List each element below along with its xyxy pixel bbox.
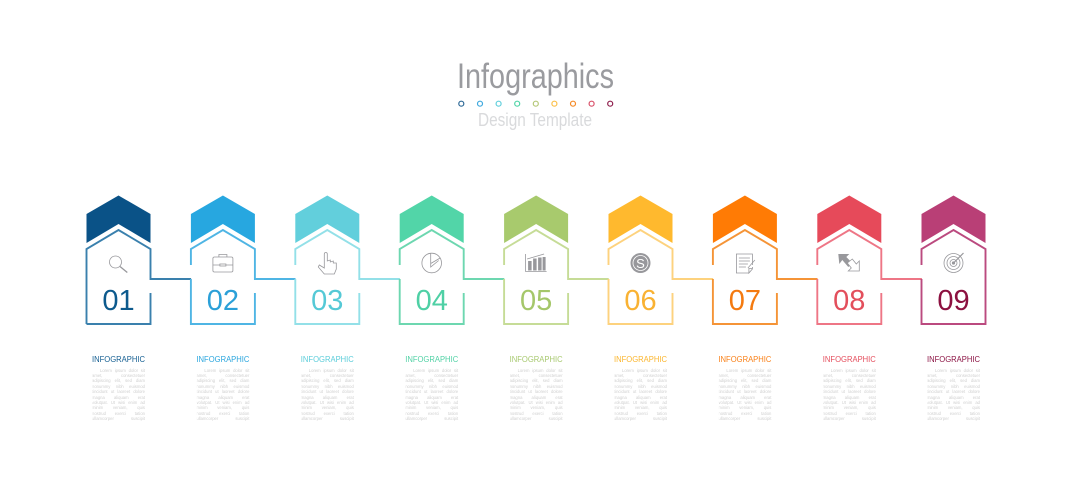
body text 05: adipiscing elit, sed diam bbox=[510, 378, 563, 383]
chevron 07 bbox=[713, 196, 777, 243]
body text 08: tincidunt ut laoreet dolore bbox=[823, 389, 876, 394]
body text 07: amet, consectetuer bbox=[718, 373, 771, 378]
number 09: 09 bbox=[937, 285, 970, 317]
body text 05: Lorem ipsum dolor sit bbox=[518, 368, 563, 372]
chevron 09 bbox=[922, 196, 986, 243]
body text 02: amet, consectetuer bbox=[196, 373, 249, 378]
body text 05: volutpat. Ut wisi enim ad bbox=[510, 400, 563, 405]
house outline 04 bbox=[400, 230, 504, 324]
icon: pie chart bbox=[422, 253, 442, 273]
body text 05: tincidunt ut laoreet dolore bbox=[510, 389, 563, 394]
body text 01: adipiscing elit, sed diam bbox=[92, 378, 145, 383]
number 08: 08 bbox=[833, 285, 865, 317]
body text 02: tincidunt ut laoreet dolore bbox=[196, 389, 249, 394]
icon: document with pen bbox=[736, 254, 755, 273]
body text 04: amet, consectetuer bbox=[405, 373, 458, 378]
body text 02: adipiscing elit, sed diam bbox=[196, 378, 249, 383]
body text 08: nonummy nibh euismod bbox=[823, 384, 876, 389]
heading 01: INFOGRAPHIC bbox=[92, 354, 145, 364]
body text 01: volutpat. Ut wisi enim ad bbox=[92, 400, 145, 405]
body text 09: Lorem ipsum dolor sit bbox=[935, 368, 980, 372]
body text 08: nostrud exerci tation bbox=[823, 411, 876, 416]
icon: dollar coin bbox=[630, 253, 650, 273]
body text 04: tincidunt ut laoreet dolore bbox=[405, 389, 458, 394]
heading 04: INFOGRAPHIC bbox=[405, 354, 458, 364]
house outline 06 bbox=[608, 230, 713, 324]
subtitle: Design Template bbox=[478, 110, 592, 130]
body text 06: minim veniam, quis bbox=[614, 405, 667, 410]
heading 09: INFOGRAPHIC bbox=[927, 354, 980, 364]
body text 07: volutpat. Ut wisi enim ad bbox=[718, 400, 771, 405]
body text 07: minim veniam, quis bbox=[718, 405, 771, 410]
step 05 bbox=[504, 196, 609, 424]
chevron 01 bbox=[86, 196, 150, 243]
body text 05: nonummy nibh euismod bbox=[510, 384, 563, 389]
house outline 09 bbox=[922, 230, 986, 324]
body text 03: magna aliquam erat bbox=[301, 395, 354, 400]
body text 02: nonummy nibh euismod bbox=[196, 384, 249, 389]
body text 07: magna aliquam erat bbox=[718, 395, 771, 400]
chevron 02 bbox=[191, 196, 255, 243]
heading 05: INFOGRAPHIC bbox=[510, 354, 563, 364]
body text 01: Lorem ipsum dolor sit bbox=[100, 368, 145, 372]
body text 07: Lorem ipsum dolor sit bbox=[726, 368, 771, 372]
body text 06: adipiscing elit, sed diam bbox=[614, 378, 667, 383]
house outline 01 bbox=[86, 230, 191, 324]
body text 01: amet, consectetuer bbox=[92, 373, 145, 378]
body text 09: nostrud exerci tation bbox=[927, 411, 980, 416]
chevron 08 bbox=[817, 196, 881, 243]
heading 03: INFOGRAPHIC bbox=[301, 354, 354, 364]
number 05: 05 bbox=[520, 285, 552, 317]
house outline 08 bbox=[817, 230, 922, 324]
body text 03: amet, consectetuer bbox=[301, 373, 354, 378]
title: Infographics bbox=[457, 57, 614, 96]
icon: diverging arrows bbox=[838, 254, 859, 271]
step 03 bbox=[295, 196, 400, 424]
number 01: 01 bbox=[102, 285, 135, 317]
heading 06: INFOGRAPHIC bbox=[614, 354, 667, 364]
icon: target bbox=[944, 253, 964, 272]
body text 06: nostrud exerci tation bbox=[614, 411, 667, 416]
body text 02: ullamcorper suscipit bbox=[196, 416, 249, 421]
body text 04: volutpat. Ut wisi enim ad bbox=[405, 400, 458, 405]
body text 09: magna aliquam erat bbox=[927, 395, 980, 400]
heading 02: INFOGRAPHIC bbox=[196, 354, 249, 364]
body text 02: Lorem ipsum dolor sit bbox=[204, 368, 249, 372]
body text 04: Lorem ipsum dolor sit bbox=[413, 368, 458, 372]
body text 01: magna aliquam erat bbox=[92, 395, 145, 400]
body text 02: volutpat. Ut wisi enim ad bbox=[196, 400, 249, 405]
body text 03: Lorem ipsum dolor sit bbox=[309, 368, 354, 372]
chevron 05 bbox=[504, 196, 568, 243]
body text 09: tincidunt ut laoreet dolore bbox=[927, 389, 980, 394]
body text 08: adipiscing elit, sed diam bbox=[823, 378, 876, 383]
chevron 06 bbox=[608, 196, 672, 243]
body text 02 bbox=[196, 368, 250, 424]
body text 09: ullamcorper suscipit bbox=[927, 416, 980, 421]
step 09 bbox=[922, 196, 986, 424]
body text 04: nostrud exerci tation bbox=[405, 411, 458, 416]
body text 03: adipiscing elit, sed diam bbox=[301, 378, 354, 383]
house outline 03 bbox=[295, 230, 400, 324]
body text 06: tincidunt ut laoreet dolore bbox=[614, 389, 667, 394]
body text 01: tincidunt ut laoreet dolore bbox=[92, 389, 145, 394]
body text 04: ullamcorper suscipit bbox=[405, 416, 458, 421]
body text 02: magna aliquam erat bbox=[196, 395, 249, 400]
step 08 bbox=[817, 196, 922, 424]
body text 07: adipiscing elit, sed diam bbox=[718, 378, 771, 383]
heading 08: INFOGRAPHIC bbox=[823, 354, 876, 364]
step 01 bbox=[86, 196, 191, 424]
body text 09: minim veniam, quis bbox=[927, 405, 980, 410]
number 02: 02 bbox=[207, 285, 239, 317]
chevron 03 bbox=[295, 196, 359, 243]
body text 07: nostrud exerci tation bbox=[718, 411, 771, 416]
body text 06: magna aliquam erat bbox=[614, 395, 667, 400]
body text 08: magna aliquam erat bbox=[823, 395, 876, 400]
house outline 07 bbox=[713, 230, 818, 324]
number 06: 06 bbox=[624, 285, 657, 317]
step 07 bbox=[713, 196, 818, 424]
body text 06: amet, consectetuer bbox=[614, 373, 667, 378]
body text 09: amet, consectetuer bbox=[927, 373, 980, 378]
body text 03: nonummy nibh euismod bbox=[301, 384, 354, 389]
body text 03: minim veniam, quis bbox=[301, 405, 354, 410]
body text 02: nostrud exerci tation bbox=[196, 411, 249, 416]
icon: pointing hand bbox=[318, 253, 336, 274]
body text 04: minim veniam, quis bbox=[405, 405, 458, 410]
body text 09: adipiscing elit, sed diam bbox=[927, 378, 980, 383]
body text 07: ullamcorper suscipit bbox=[718, 416, 771, 421]
step 06 bbox=[608, 196, 713, 424]
body text 08: ullamcorper suscipit bbox=[823, 416, 876, 421]
body text 01: ullamcorper suscipit bbox=[92, 416, 145, 421]
body text 04: adipiscing elit, sed diam bbox=[405, 378, 458, 383]
body text 02: minim veniam, quis bbox=[196, 405, 249, 410]
body text 08: Lorem ipsum dolor sit bbox=[831, 368, 876, 372]
heading 07: INFOGRAPHIC bbox=[718, 354, 771, 364]
number 03: 03 bbox=[311, 285, 343, 317]
body text 06: Lorem ipsum dolor sit bbox=[622, 368, 667, 372]
step 04 bbox=[400, 196, 504, 424]
body text 04: nonummy nibh euismod bbox=[405, 384, 458, 389]
body text 05: minim veniam, quis bbox=[510, 405, 563, 410]
body text 01: minim veniam, quis bbox=[92, 405, 145, 410]
body text 07 bbox=[718, 368, 772, 424]
body text 06: nonummy nibh euismod bbox=[614, 384, 667, 389]
body text 08: amet, consectetuer bbox=[823, 373, 876, 378]
body text 01: nonummy nibh euismod bbox=[92, 384, 145, 389]
body text 04: magna aliquam erat bbox=[405, 395, 458, 400]
number 07: 07 bbox=[729, 285, 761, 317]
body text 06: ullamcorper suscipit bbox=[614, 416, 667, 421]
body text 08: minim veniam, quis bbox=[823, 405, 876, 410]
body text 06 bbox=[614, 368, 668, 424]
house outline 05 bbox=[504, 230, 609, 324]
icon: magnifier bbox=[110, 256, 127, 272]
body text 07: tincidunt ut laoreet dolore bbox=[718, 389, 771, 394]
body text 07: nonummy nibh euismod bbox=[718, 384, 771, 389]
icon: briefcase bbox=[213, 254, 233, 272]
row of coloured dots bbox=[459, 101, 613, 106]
icon: dollar coin: S bbox=[636, 256, 645, 271]
icon: bar chart bbox=[526, 254, 547, 272]
body text 01: nostrud exerci tation bbox=[92, 411, 145, 416]
body text 09 bbox=[927, 368, 981, 424]
body text 03: tincidunt ut laoreet dolore bbox=[301, 389, 354, 394]
body text 05: ullamcorper suscipit bbox=[510, 416, 563, 421]
body text 01 bbox=[92, 368, 146, 424]
body text 05 bbox=[510, 368, 564, 424]
body text 04 bbox=[405, 368, 459, 424]
body text 05: amet, consectetuer bbox=[510, 373, 563, 378]
house outline 02 bbox=[191, 230, 296, 324]
body text 06: volutpat. Ut wisi enim ad bbox=[614, 400, 667, 405]
number 04: 04 bbox=[416, 285, 448, 317]
step 02 bbox=[191, 196, 296, 424]
body text 05: magna aliquam erat bbox=[510, 395, 563, 400]
body text 08 bbox=[823, 368, 877, 424]
body text 03: ullamcorper suscipit bbox=[301, 416, 354, 421]
body text 08: volutpat. Ut wisi enim ad bbox=[823, 400, 876, 405]
body text 05: nostrud exerci tation bbox=[510, 411, 563, 416]
chevron 04 bbox=[400, 196, 464, 243]
body text 03: nostrud exerci tation bbox=[301, 411, 354, 416]
body text 09: nonummy nibh euismod bbox=[927, 384, 980, 389]
body text 09: volutpat. Ut wisi enim ad bbox=[927, 400, 980, 405]
body text 03: volutpat. Ut wisi enim ad bbox=[301, 400, 354, 405]
body text 03 bbox=[301, 368, 355, 424]
